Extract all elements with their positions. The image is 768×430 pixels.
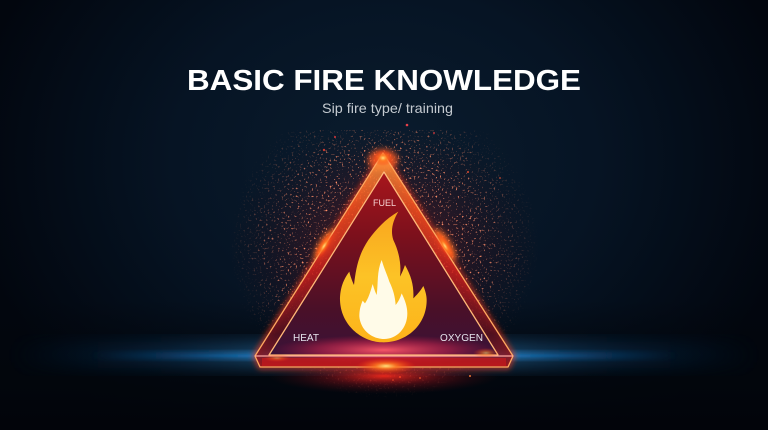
triangle band [255, 153, 513, 367]
triangle inner panel [269, 172, 498, 355]
flame inner [359, 260, 407, 339]
flame outer [340, 212, 427, 342]
label: fuel: FUEL [373, 198, 396, 209]
triangle neon outlines [255, 153, 513, 367]
red glow below triangle [269, 358, 499, 394]
label: oxygen: OXYGEN [440, 332, 483, 344]
ember particles [220, 124, 548, 400]
fire triangle [255, 150, 513, 374]
title: BASIC FIRE KNOWLEDGE [187, 65, 581, 97]
triangle outer glow [255, 149, 513, 367]
base corner glows [262, 335, 506, 366]
label: heat: HEAT [293, 332, 320, 344]
horizon light line [10, 342, 758, 368]
subtitle: Sip fire type/ training [322, 100, 453, 116]
hot spots [263, 150, 499, 374]
icon: flame [340, 212, 427, 342]
